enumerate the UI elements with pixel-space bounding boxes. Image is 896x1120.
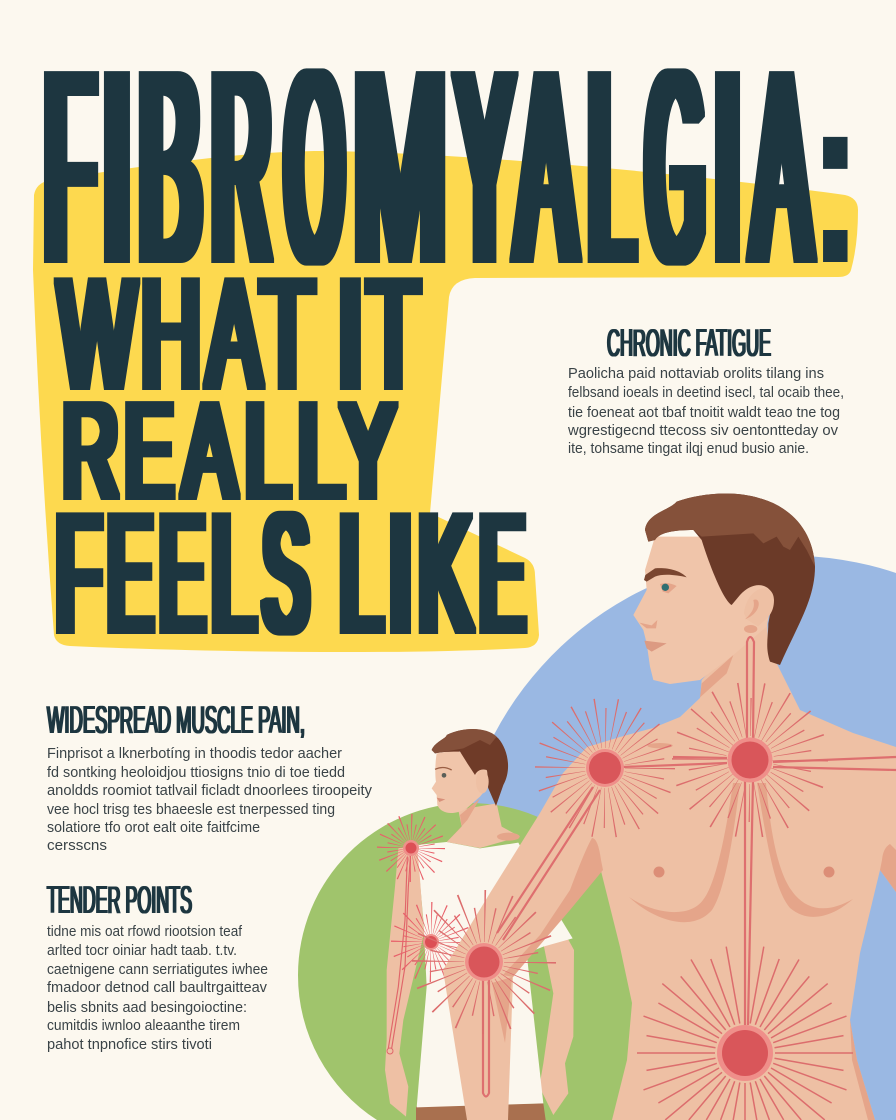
- large figure collarbone shade: [647, 743, 673, 748]
- large figure neck shading: [700, 655, 733, 697]
- text block: tender points: [47, 879, 268, 1053]
- large figure nipples: [654, 866, 834, 878]
- title line: FEELS LIKE: F: [56, 479, 101, 667]
- small figure pain burst: shoulder: [390, 827, 432, 869]
- pain burst: chest: [701, 711, 799, 809]
- title line: WHAT IT: H: [141, 247, 201, 420]
- title line: FEELS LIKE: E: [108, 479, 152, 667]
- small figure lips: [437, 798, 445, 802]
- title line: FIBROMYALGIA: R: [213, 14, 270, 319]
- title line: FEELS LIKE: L: [211, 479, 256, 667]
- large figure nose shadow: [639, 620, 657, 628]
- large figure elbow shading: [492, 977, 512, 1043]
- title line: FIBROMYALGIA: I: [714, 14, 741, 319]
- body copy: chronic fatigue: wgrestigecnd ttecoss siv oentontteday ov: [567, 423, 839, 439]
- large figure hair: [645, 494, 815, 665]
- large figure left armpit shading: [503, 838, 603, 977]
- large figure lips: [644, 641, 667, 652]
- large figure ear: [744, 588, 774, 627]
- small figure neck: [447, 803, 520, 848]
- large figure left chest curve: [629, 783, 740, 922]
- title line: FEELS LIKE: I: [387, 479, 414, 667]
- text block: widespread muscle pain: WIDESPREAD MUSCLE PAIN,: [47, 699, 305, 742]
- small figure shirt: [417, 842, 573, 1107]
- body copy: widespread muscle pain: anoldds roomiot tatlvail ficladt dnoorlees tiroopeity: [47, 783, 373, 799]
- body copy: widespread muscle pain: fd sontking heoloidjou ttiosigns tnio di toe tiedd: [47, 765, 345, 781]
- body copy: chronic fatigue: Paolicha paid nottaviab orolits tilang ins: [568, 366, 824, 382]
- body copy: widespread muscle pain: vee hocl trisg tes bhaeesle est tnerpessed ting: [47, 802, 335, 818]
- body copy: widespread muscle pain: [47, 746, 373, 854]
- body copy: chronic fatigue: tie foeneat aot tbaf tnoitit waldt teao tne tog: [568, 405, 840, 421]
- body copy: chronic fatigue: [567, 366, 844, 457]
- small figure eye and brow: [435, 767, 452, 770]
- pain burst: abdomen: [637, 947, 853, 1120]
- title line: WHAT IT: A: [208, 247, 261, 420]
- title line: REALLY: R: [62, 375, 118, 526]
- title: [45, 14, 851, 667]
- blue background circle: [456, 556, 896, 1120]
- title line: WHAT IT: T: [260, 247, 312, 420]
- title line: FIBROMYALGIA: M: [354, 14, 446, 319]
- body copy: widespread muscle pain: Finprisot a lknerbotíng in thoodis tedor aacher: [47, 746, 342, 762]
- large figure right armpit shading: [880, 844, 896, 892]
- title line: WHAT IT: T: [368, 247, 419, 420]
- title line: REALLY: A: [184, 375, 235, 526]
- small figure right arm: [539, 937, 574, 1115]
- text block: chronic fatigue: [567, 322, 844, 457]
- small figure ear: [476, 770, 489, 793]
- title line: REALLY: L: [297, 375, 344, 526]
- title line: FEELS LIKE: E: [160, 479, 204, 667]
- body copy: chronic fatigue: ite, tohsame tingat ilqj enud busio anie.: [568, 441, 809, 457]
- pain burst: elbow: [438, 916, 530, 1008]
- body copy: tender points: belis sbnits aad besingoioctine:: [47, 1000, 247, 1016]
- title: E: [480, 479, 524, 667]
- title line: FIBROMYALGIA: G: [647, 14, 704, 319]
- title line: FIBROMYALGIA: B: [139, 14, 201, 319]
- large figure nerve lines: [483, 637, 896, 1096]
- title line: WHAT IT: W: [59, 247, 135, 420]
- large figure waist edge shading: [850, 1020, 875, 1120]
- large figure eye: [660, 583, 677, 593]
- large figure eyebrow: [644, 568, 687, 582]
- title line: FIBROMYALGIA: Y: [457, 14, 512, 319]
- large figure: [438, 494, 896, 1120]
- body copy: tender points: tidne mis oat rfowd riootsion teaf: [47, 924, 243, 940]
- small figure face: [432, 750, 490, 813]
- body copy: tender points: fmadoor detnod call baultrgaitteav: [47, 980, 268, 996]
- small figure shorts: [416, 1103, 546, 1120]
- title colon: :: [820, 61, 851, 304]
- title line: FEELS LIKE: K: [418, 479, 471, 667]
- title line: FIBROMYALGIA: O: [286, 14, 342, 319]
- title line: FIBROMYALGIA: I: [102, 14, 132, 319]
- body copy: widespread muscle pain: solatiore tfo orot ealt oite faitfcime: [47, 820, 260, 836]
- title line: FIBROMYALGIA: A: [517, 14, 575, 319]
- large figure earlobe pain spot: [744, 625, 757, 633]
- large figure neck: [700, 613, 800, 712]
- pain burst: left shoulder: [560, 723, 650, 813]
- title line: REALLY: L: [244, 375, 290, 526]
- title line: REALLY: Y: [341, 375, 395, 526]
- body copy: tender points: arlted tocr oiniar hadt taab. t.tv.: [47, 943, 237, 959]
- body copy: chronic fatigue: felbsand ioeals in deetind isecl, tal ocaib thee,: [568, 385, 844, 401]
- small figure hair: [432, 729, 508, 806]
- title line: REALLY: E: [125, 375, 173, 526]
- small figure neck shading: [448, 798, 480, 841]
- large figure right chest curve: [757, 783, 853, 917]
- small figure nerve lines: [388, 853, 411, 1048]
- text block: widespread muscle pain: [47, 699, 373, 854]
- green background shape: [298, 803, 642, 1120]
- large figure face: [633, 537, 773, 684]
- title line: FEELS LIKE: S: [263, 479, 308, 667]
- title line: WHAT IT: I: [335, 247, 365, 420]
- body copy: tender points: [47, 924, 268, 1053]
- small figure: [385, 729, 574, 1120]
- title line: FIBROMYALGIA: F: [45, 14, 94, 319]
- body copy: tender points: caetnigene cann serriatigutes iwhee: [47, 962, 268, 978]
- large figure torso and arm: [443, 640, 896, 1120]
- title line: FIBROMYALGIA: L: [589, 14, 634, 319]
- yellow title highlight shape: [33, 151, 858, 652]
- body copy: widespread muscle pain: cersscns: [47, 838, 107, 854]
- small figure pain burst: torso: [407, 918, 455, 966]
- title line: FEELS LIKE: L: [339, 479, 382, 667]
- body copy: tender points: cumitdis iwnloo aleaanthe tirem: [47, 1018, 240, 1034]
- small figure left arm: [385, 844, 424, 1117]
- text block: tender points: TENDER POINTS: [47, 879, 192, 922]
- body copy: tender points: pahot tnpnofice stirs tivoti: [47, 1037, 212, 1053]
